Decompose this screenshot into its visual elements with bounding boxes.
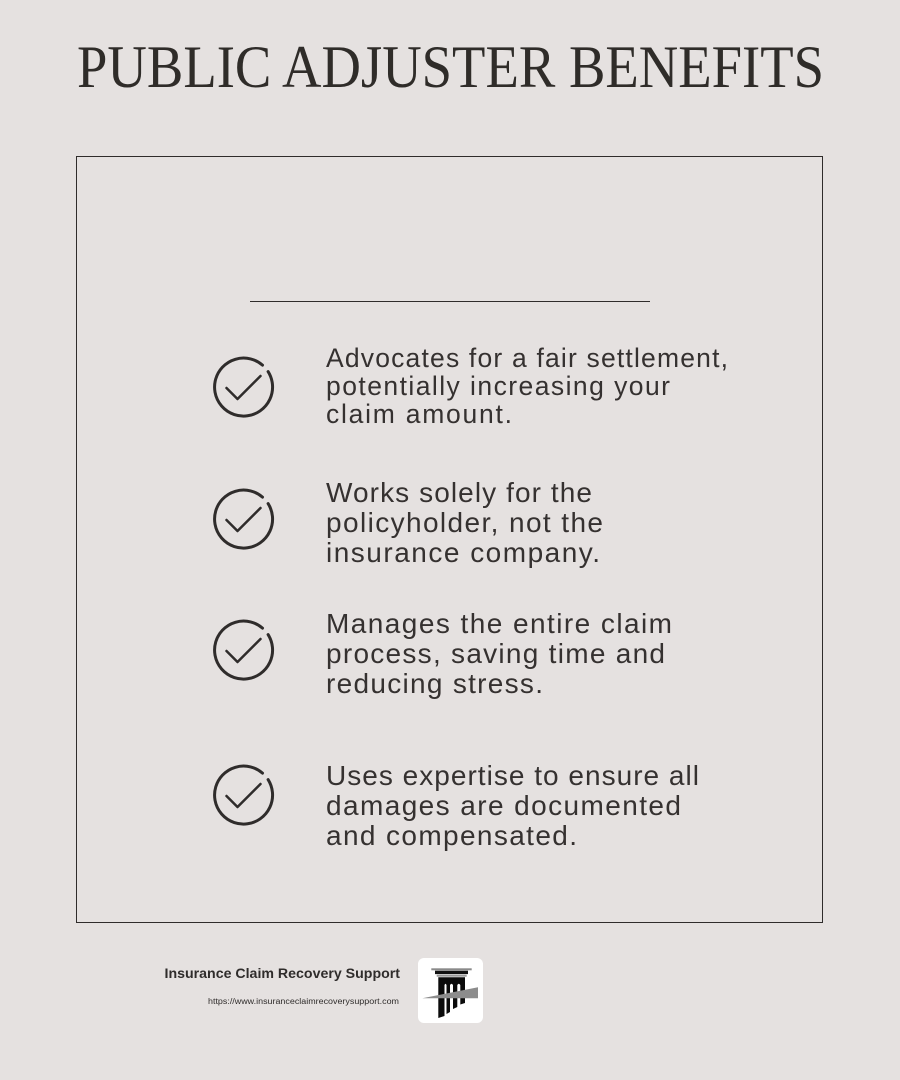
benefit 2 (215, 477, 603, 568)
footer: company name: Insurance Claim Recovery Support (164, 966, 401, 981)
text: benefit 2: insurance company. (326, 537, 600, 568)
icon: check circle 2 (215, 490, 273, 548)
text: benefit 3: process, saving time and (326, 638, 665, 669)
text: benefit 3: reducing stress. (326, 668, 543, 699)
icon: company logo (418, 958, 483, 1023)
text: benefit 3: Manages the entire claim (326, 608, 672, 639)
text: benefit 4: and compensated. (326, 820, 577, 851)
text: benefit 2: Works solely for the (326, 477, 592, 508)
icon: check circle 3 (215, 621, 273, 679)
icon: check circle 1 (215, 358, 273, 416)
text: benefit 4 (326, 760, 699, 851)
benefit 4 (215, 760, 699, 851)
text: benefit 2: policyholder, not the (326, 507, 603, 538)
icon: check circle 4 (215, 766, 273, 824)
text: benefit 3 (326, 608, 672, 699)
text: benefit 4: damages are documented (326, 790, 681, 821)
text: benefit 4: Uses expertise to ensure all (326, 760, 699, 791)
panel: benefits frame (76, 156, 822, 922)
text: benefit 2 (326, 477, 603, 568)
benefit 3 (215, 608, 672, 699)
text: benefit 1: Advocates for a fair settlement, (326, 343, 728, 373)
text: benefit 1: potentially increasing your (326, 371, 670, 401)
title: PUBLIC ADJUSTER BENEFITS (77, 34, 824, 100)
footer: website url: https://www.insuranceclaimrecoverysupport.com (208, 997, 399, 1006)
text: benefit 1 (326, 343, 728, 429)
benefit 1 (215, 343, 728, 429)
text: benefit 1: claim amount. (326, 399, 512, 429)
